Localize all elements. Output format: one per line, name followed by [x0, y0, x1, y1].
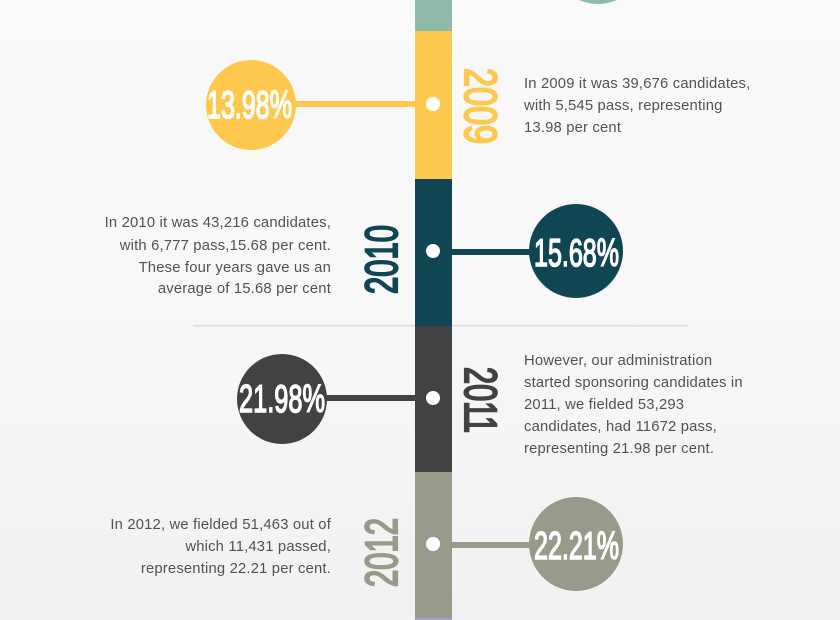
circle: previous year (cropped) — [552, 0, 644, 4]
dot 2010 — [426, 244, 440, 258]
text 2011: candidates, had 11672 pass, — [524, 419, 717, 435]
text 2011: representing 21.98 per cent. — [524, 441, 714, 457]
connector 2010 — [452, 249, 532, 255]
entry: 2012 — [110, 497, 623, 591]
text 2012: In 2012, we fielded 51,463 out of — [110, 517, 332, 533]
year 2012: 2012 — [356, 518, 407, 587]
dot 2011 — [426, 391, 440, 405]
value 13.98%: 13.98% — [207, 84, 292, 127]
year 2011: 2011 — [455, 367, 506, 433]
circle 13.98% — [206, 60, 296, 150]
text 2011: However, our administration — [524, 353, 712, 369]
dot 2009 — [426, 97, 440, 111]
divider — [193, 325, 688, 326]
connector 2009 — [290, 101, 415, 107]
text 2010: with 6,777 pass,15.68 per cent. — [119, 238, 331, 254]
value 22.21%: 22.21% — [534, 525, 619, 568]
circle 15.68% — [529, 204, 623, 298]
text 2012: representing 22.21 per cent. — [141, 561, 331, 577]
circle 22.21% — [529, 497, 623, 591]
year 2009: 2009 — [455, 68, 506, 144]
text 2010: These four years gave us an — [139, 260, 331, 276]
dot 2012 — [426, 537, 440, 551]
entry: 2010 — [105, 204, 623, 298]
connector 2012 — [452, 542, 532, 548]
text 2012: which 11,431 passed, — [184, 539, 331, 555]
text 2009: In 2009 it was 39,676 candidates, — [524, 76, 750, 92]
text 2011: started sponsoring candidates in — [524, 375, 743, 391]
value 15.68%: 15.68% — [534, 232, 619, 275]
text 2010: In 2010 it was 43,216 candidates, — [105, 215, 331, 231]
timeline bar — [415, 0, 452, 620]
text 2009: 13.98 per cent — [524, 120, 621, 136]
connector 2011 — [325, 395, 415, 401]
circle 21.98% — [237, 354, 327, 444]
year 2010: 2010 — [356, 225, 407, 294]
entry: 2009 — [206, 60, 750, 150]
entry: 2011 — [237, 353, 743, 457]
text 2011: 2011, we fielded 53,293 — [524, 397, 684, 413]
text 2010: average of 15.68 per cent — [158, 281, 331, 297]
value 21.98%: 21.98% — [239, 378, 325, 421]
text 2009: with 5,545 pass, representing — [523, 98, 723, 114]
